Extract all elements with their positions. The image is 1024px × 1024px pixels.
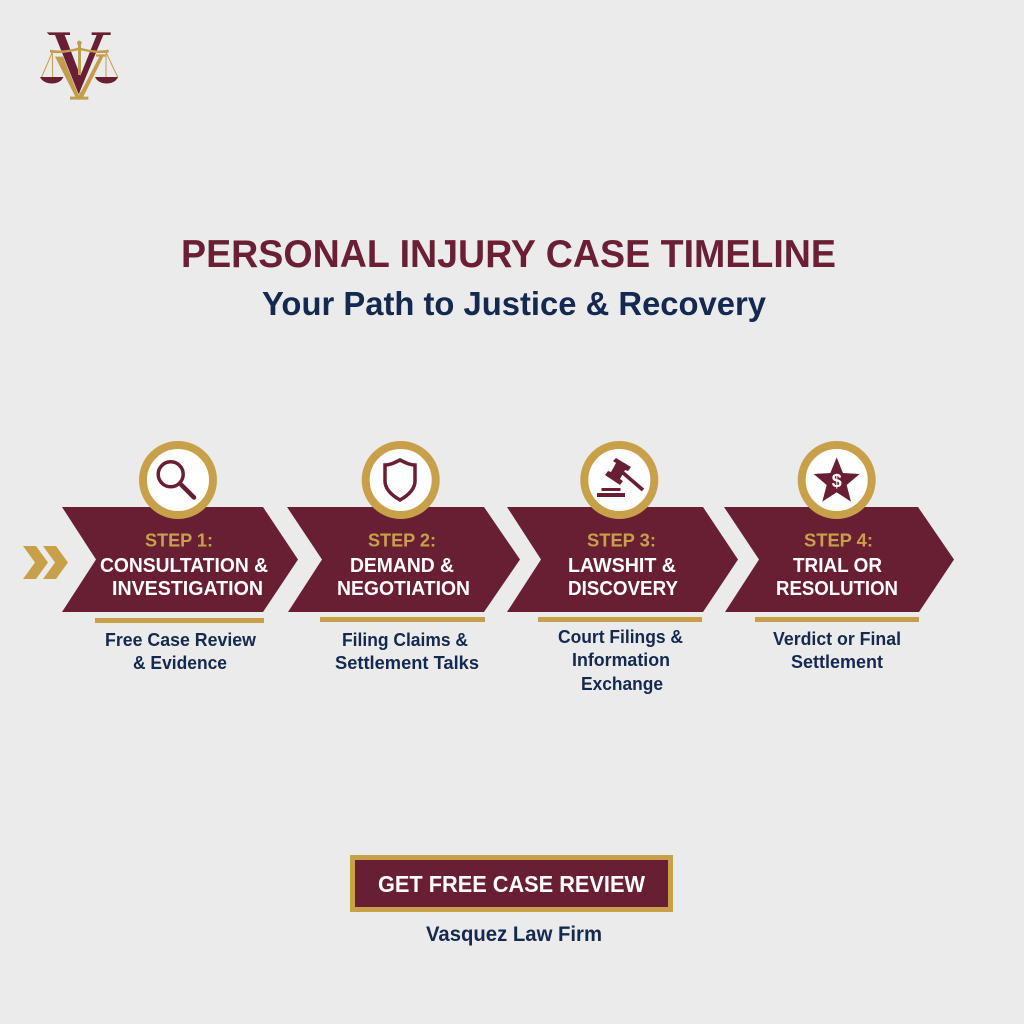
step 1 heading: CONSULTATION & <box>100 555 268 577</box>
step 1 chevron <box>62 507 298 612</box>
step 4 chevron <box>724 507 954 612</box>
step 1 underline <box>95 618 264 623</box>
step 4 underline <box>755 617 919 622</box>
step 4 icon: star with dollar sign <box>802 445 872 515</box>
call to action button <box>352 858 670 910</box>
step 2 underline <box>320 617 485 622</box>
step 3 heading <box>568 555 679 600</box>
step 1 icon: magnifying glass <box>143 445 213 515</box>
call to action button: GET FREE CASE REVIEW <box>378 871 645 897</box>
step 1 label: STEP 1: <box>145 530 213 550</box>
step 4 description <box>773 629 901 672</box>
firm name: Vasquez Law Firm <box>426 923 602 946</box>
step 3 chevron <box>507 507 738 612</box>
step 2 icon: shield <box>366 445 436 515</box>
step 3 label: STEP 3: <box>587 530 656 550</box>
step 1 heading <box>100 555 268 600</box>
step 2 description: Filing Claims & <box>342 630 468 650</box>
step 3 description <box>558 627 683 694</box>
step 3 heading: DISCOVERY <box>568 578 679 600</box>
step 2 description <box>335 630 479 673</box>
step 2 heading: NEGOTIATION <box>337 578 470 600</box>
subtitle: Your Path to Justice & Recovery <box>262 285 767 322</box>
panel: step 2 <box>287 445 520 673</box>
step 2 heading: DEMAND & <box>350 555 454 577</box>
step 1 description: Free Case Review <box>105 630 257 650</box>
step 1 description <box>105 630 257 673</box>
step 4 icon: star with dollar sign: $ <box>832 471 842 491</box>
panel: step 1 <box>62 445 298 673</box>
step 3 description: Exchange <box>581 674 663 694</box>
step 2 description: Settlement Talks <box>335 653 479 673</box>
step 3 description: Information <box>572 650 670 670</box>
step 4 description: Settlement <box>791 652 883 672</box>
step 1 heading: INVESTIGATION <box>112 578 263 600</box>
step 2 heading <box>337 555 470 600</box>
icon: lead-in double chevron arrow <box>23 546 68 579</box>
title: PERSONAL INJURY CASE TIMELINE <box>181 233 836 276</box>
step 2 label: STEP 2: <box>368 530 436 550</box>
step 3 icon: gavel <box>584 445 654 515</box>
step 3 description: Court Filings & <box>558 627 683 647</box>
step 4 heading <box>776 555 898 600</box>
step 3 heading: LAWSHIT & <box>568 555 676 577</box>
step 2 chevron <box>287 507 520 612</box>
step 4 description: Verdict or Final <box>773 629 901 649</box>
step 4 heading: TRIAL OR <box>793 555 883 577</box>
step 1 description: & Evidence <box>133 653 227 673</box>
step 3 underline <box>538 617 702 622</box>
panel: step 4 <box>724 445 954 672</box>
panel: step 3 <box>507 445 738 694</box>
step 4 label: STEP 4: <box>804 530 873 550</box>
step 4 heading: RESOLUTION <box>776 578 898 600</box>
logo: V with scales of justice <box>40 32 118 100</box>
